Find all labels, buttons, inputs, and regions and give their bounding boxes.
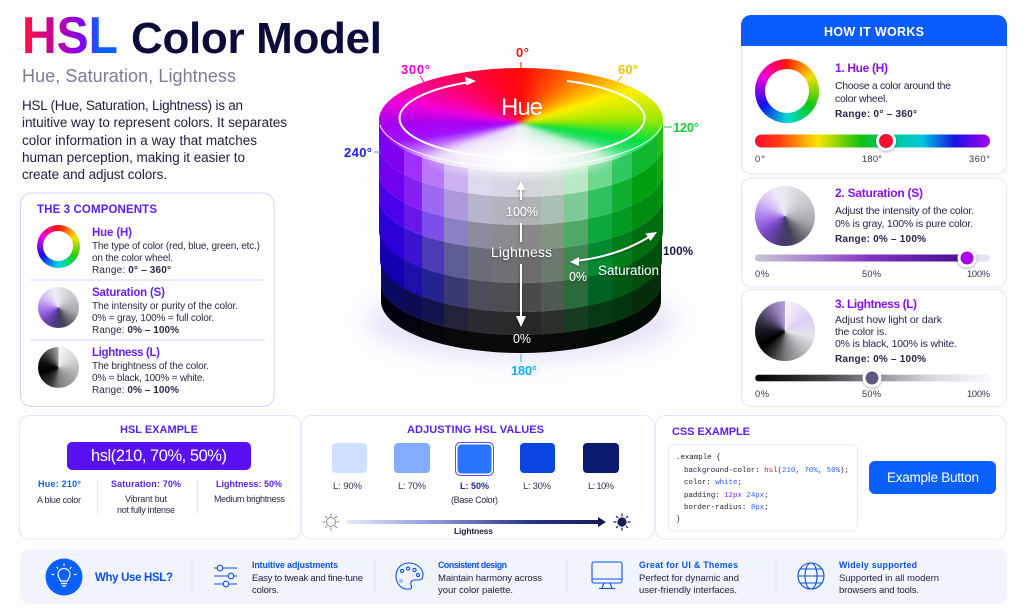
step 1 text: color wheel. (835, 93, 888, 105)
icon: light bulb (46, 558, 82, 596)
code block: } (676, 516, 680, 524)
hue degree labels: 60° (618, 62, 638, 77)
step 2 text: Adjust the intensity of the color. (835, 205, 974, 217)
step 2 text (835, 186, 974, 245)
benefit: consistent design: Consistent design (438, 560, 507, 570)
saturation slider: 100% (967, 269, 990, 279)
code block: border-radius: 8px; (684, 504, 769, 512)
subtitle: Hue, Saturation, Lightness (22, 66, 236, 86)
lightness value: Lightness: 50% (216, 479, 282, 489)
lightness sphere (755, 301, 815, 361)
hue degree labels: 120° (673, 120, 699, 135)
component: hue: The type of color (red, blue, green, etc.) (92, 241, 260, 252)
hue ring arrow (400, 76, 645, 158)
icon: light sun (322, 514, 340, 530)
component: lightness: Lightness (L) (92, 347, 160, 359)
cylinder side: lightness and saturation bands (379, 120, 663, 353)
hue degree labels (344, 45, 699, 378)
benefit: intuitive adjustments: Easy to tweak and fine-tune (252, 573, 363, 584)
icon: palette (396, 563, 423, 589)
swatch labels: L: 70% (398, 481, 427, 492)
panel: hsl example (20, 416, 301, 539)
cylinder top: hue wheel (379, 68, 663, 172)
component: hue: on the color wheel. (92, 253, 173, 264)
heading: css example: CSS EXAMPLE (672, 426, 750, 438)
step 3 text (835, 297, 957, 365)
panel: how it works (741, 15, 1007, 174)
title: HSL (22, 7, 118, 65)
benefit: intuitive adjustments: Intuitive adjustments (252, 560, 338, 570)
code block (668, 444, 858, 531)
icon: globe (798, 563, 824, 589)
step 1 text: Choose a color around the (835, 80, 951, 92)
step 2 text: 2. Saturation (S) (835, 186, 923, 200)
intro paragraph (22, 98, 287, 182)
step 1 text (835, 61, 951, 120)
hue slider: 180° (862, 154, 882, 164)
step 3 text: the color is. (835, 326, 887, 338)
component: saturation (38, 286, 238, 336)
intro paragraph: intuitive way to represent colors. It separates (22, 115, 287, 130)
lightness arrow: Lightness (454, 526, 493, 536)
hue value: Hue: 210° (38, 479, 81, 489)
hue value: A blue color (37, 495, 81, 505)
hue value (37, 479, 81, 505)
heading: hsl example: HSL EXAMPLE (120, 424, 198, 436)
title (22, 7, 382, 65)
step 1 text: 1. Hue (H) (835, 61, 888, 75)
hsl value box (67, 442, 251, 470)
benefit: consistent design: your color palette. (438, 585, 513, 596)
benefit: ui and themes: Great for UI & Themes (639, 560, 738, 570)
code block: color: white; (684, 479, 742, 487)
swatch labels: L: 50% (460, 481, 489, 491)
code block: padding: 12px 24px; (684, 492, 769, 500)
swatch labels: L: 30% (523, 481, 552, 492)
panel: css example (656, 416, 1006, 539)
saturation sphere (755, 186, 815, 246)
lightness slider: 100% (967, 389, 990, 399)
component: lightness: Range: 0% – 100% (92, 385, 179, 396)
saturation axis: Saturation (598, 263, 659, 278)
component: saturation: The intensity or purity of the color. (92, 301, 238, 312)
component: hue (36, 224, 260, 276)
why use hsl label: Why Use HSL? (95, 572, 173, 584)
label: hue: Hue (501, 94, 543, 121)
hue slider: 360° (969, 154, 990, 164)
saturation value: not fully intense (117, 505, 175, 515)
hue degree labels: 300° (401, 62, 430, 77)
swatch labels: L: 10% (588, 481, 615, 492)
lightness axis: 0% (513, 332, 531, 346)
panel: saturation step (742, 178, 1006, 287)
code block: background-color: hsl(210, 70%, 50%); (684, 467, 849, 475)
hue degree labels: 240° (344, 145, 372, 160)
component: lightness: 0% = black, 100% = white. (92, 373, 205, 384)
step 2 text: Range: 0% – 100% (835, 234, 926, 245)
saturation value: Saturation: 70% (111, 479, 181, 489)
benefit: ui and themes: Perfect for dynamic and (639, 573, 739, 584)
saturation value (111, 479, 181, 515)
lightness value: Medium brightness (214, 494, 286, 504)
lightness axis (491, 181, 552, 346)
component: lightness: The brightness of the color. (92, 361, 209, 372)
saturation value: Vibrant but (125, 494, 167, 504)
intro paragraph: color information in a way that matches (22, 133, 257, 148)
hue slider: 0° (755, 154, 765, 164)
panel: adjusting hsl values (302, 416, 654, 539)
step 3 text: Adjust how light or dark (835, 314, 943, 326)
hsl value box: hsl(210, 70%, 50%) (91, 447, 227, 465)
lightness axis: Lightness (491, 244, 552, 260)
lightness slider (755, 368, 990, 399)
swatch labels: (Base Color) (451, 495, 498, 505)
hue degree labels: 180° (511, 363, 537, 378)
hue wheel (755, 59, 819, 123)
lightness slider: 50% (862, 389, 881, 399)
icon: monitor (592, 562, 622, 588)
benefit: widely supported: browsers and tools. (839, 585, 919, 596)
panel: why use hsl (20, 549, 1007, 604)
component: saturation: Saturation (S) (92, 287, 165, 299)
lightness arrow (347, 517, 606, 536)
header bar: HOW IT WORKS (824, 25, 924, 39)
component: saturation: Range: 0% – 100% (92, 325, 179, 336)
benefit: widely supported: Supported in all modern (839, 573, 939, 584)
step 1 text: Range: 0° – 360° (835, 109, 917, 120)
swatches (332, 442, 619, 476)
lightness axis: 100% (506, 205, 538, 219)
benefit: widely supported: Widely supported (839, 560, 917, 570)
benefit: consistent design: Maintain harmony across (438, 573, 542, 584)
benefit: intuitive adjustments: colors. (252, 585, 279, 596)
code block: .example { (676, 454, 721, 462)
hue slider (755, 131, 990, 164)
benefit: consistent design (438, 560, 542, 596)
panel: lightness step (742, 290, 1006, 406)
example button (869, 461, 996, 494)
swatch labels: L: 90% (333, 481, 363, 492)
intro paragraph: human perception, making it easier to (22, 150, 245, 165)
hue degree labels: 0° (516, 45, 529, 60)
hsl cylinder diagram (344, 45, 699, 378)
step 3 text: 3. Lightness (L) (835, 297, 917, 311)
benefit: widely supported (839, 560, 939, 596)
step 2 text: 0% is gray, 100% is pure color. (835, 218, 973, 230)
intro paragraph: create and adjust colors. (22, 167, 167, 182)
title: Color Model (131, 14, 382, 63)
label: saturation 100%: 100% (663, 245, 694, 258)
benefit: ui and themes (639, 560, 739, 596)
component: hue: Range: 0° – 360° (92, 265, 171, 276)
component: hue: Hue (H) (92, 227, 132, 239)
saturation slider: 50% (862, 269, 881, 279)
saturation axis (569, 232, 659, 284)
step 3 text: 0% is black, 100% is white. (835, 338, 957, 350)
step 3 text: Range: 0% – 100% (835, 354, 926, 365)
heading: the 3 components: THE 3 COMPONENTS (37, 204, 157, 216)
icon: dark sun (614, 514, 630, 530)
panel: the 3 components (20, 193, 274, 406)
saturation axis: 0% (569, 270, 587, 284)
component: lightness (38, 346, 209, 396)
lightness slider: 0% (755, 389, 769, 399)
lightness value (214, 479, 286, 504)
saturation slider (755, 248, 990, 279)
benefit: intuitive adjustments (252, 560, 363, 596)
swatch labels (333, 481, 615, 505)
benefit: ui and themes: user-friendly interfaces. (639, 585, 737, 596)
example button: Example Button (887, 470, 979, 485)
intro paragraph: HSL (Hue, Saturation, Lightness) is an (22, 98, 243, 113)
header bar (741, 15, 1007, 46)
saturation slider: 0% (755, 269, 769, 279)
icon: sliders (214, 565, 237, 587)
component: saturation: 0% = gray, 100% = full color. (92, 313, 214, 324)
heading: adjusting hsl values: ADJUSTING HSL VALUES (407, 424, 544, 436)
